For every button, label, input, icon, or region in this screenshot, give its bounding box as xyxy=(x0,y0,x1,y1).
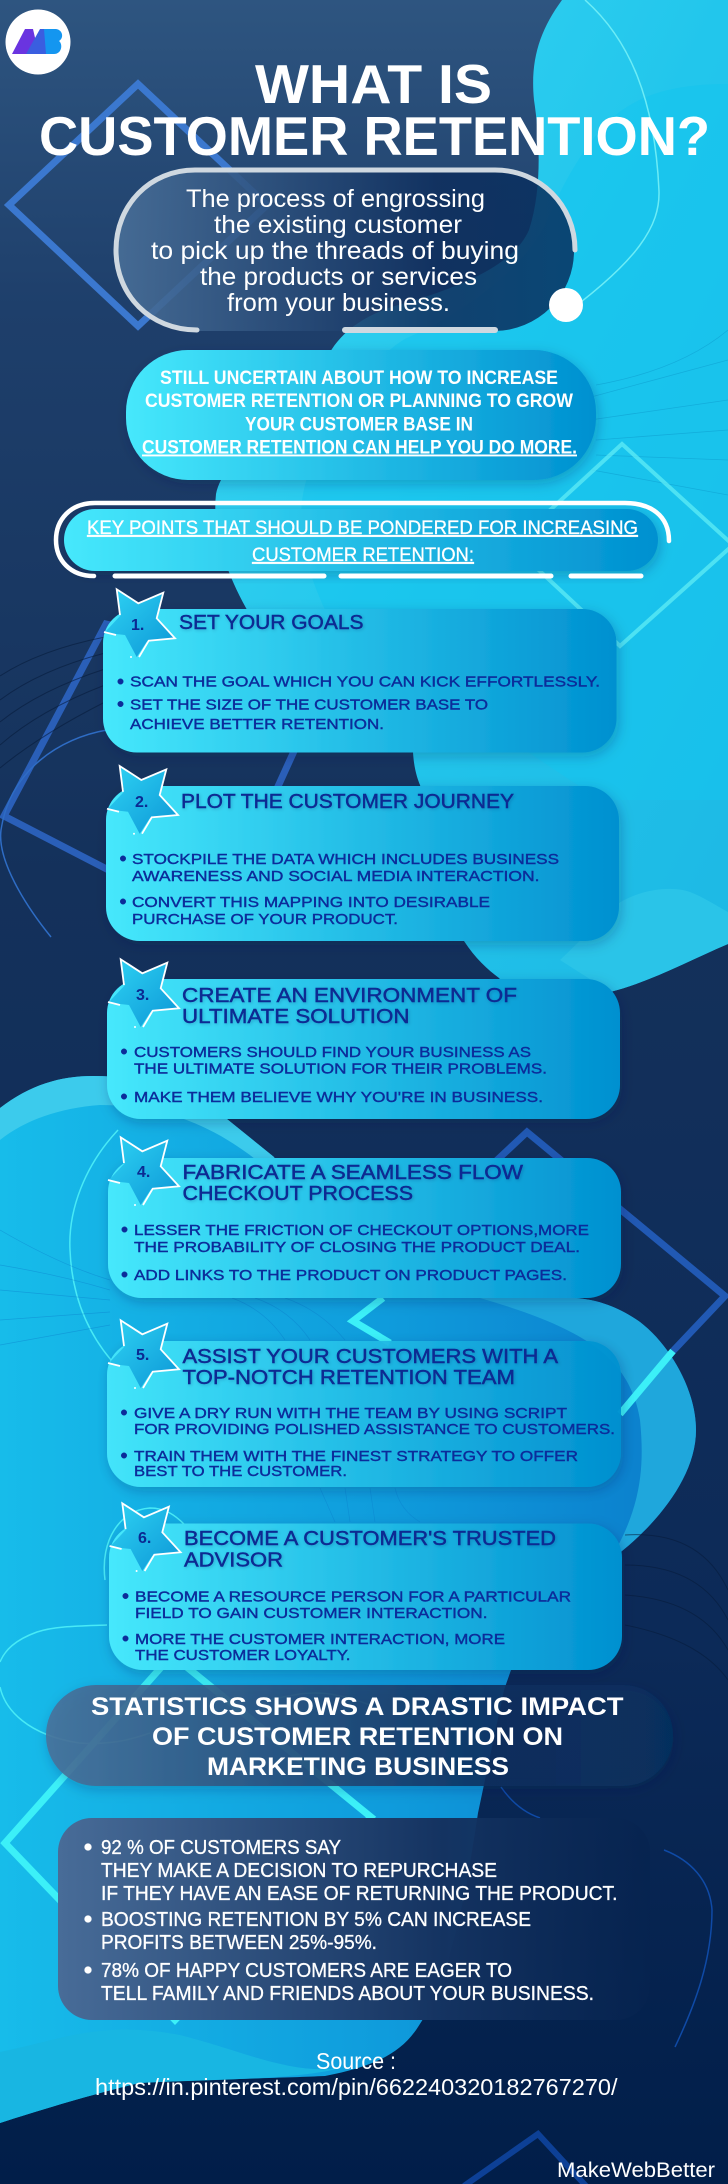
source xyxy=(95,2048,618,2100)
blob: upper right xyxy=(215,0,728,998)
decorative diamond: right cyan xyxy=(512,444,728,646)
bullets: AWARENESS AND SOCIAL MEDIA INTERACTION. xyxy=(132,868,540,885)
definition text: to pick up the threads of buying xyxy=(151,237,519,265)
blob: lower left lighter top band xyxy=(0,1076,290,1190)
callout text: YOUR CUSTOMER BASE IN xyxy=(245,414,473,436)
statistics bullets: 78% OF HAPPY CUSTOMERS ARE EAGER TO xyxy=(101,1960,512,1982)
panel: statistics heading xyxy=(46,1685,673,1786)
decorative curve: left arc xyxy=(1,730,107,937)
title: CUSTOMER RETENTION? xyxy=(39,105,710,167)
key points text xyxy=(87,518,638,566)
definition text: The process of engrossing xyxy=(186,185,485,213)
panel: definition xyxy=(116,168,575,331)
heading: TOP-NOTCH RETENTION TEAM xyxy=(182,1367,515,1389)
bullets: CONVERT THIS MAPPING INTO DESIRABLE xyxy=(132,894,490,911)
key points text: CUSTOMER RETENTION: xyxy=(252,545,474,566)
callout text: CUSTOMER RETENTION OR PLANNING TO GROW xyxy=(145,391,573,412)
bullets: SET THE SIZE OF THE CUSTOMER BASE TO xyxy=(130,696,488,714)
blob: lower left xyxy=(0,1076,696,2123)
heading: ADVISOR xyxy=(184,1550,283,1572)
blob: upper right inner layer xyxy=(301,84,728,800)
star badge 1: 1. xyxy=(131,617,144,634)
decorative curve: top right arc xyxy=(557,0,659,320)
key points text: KEY POINTS THAT SHOULD BE PONDERED FOR INCREASING xyxy=(87,518,638,539)
heading: CHECKOUT PROCESS xyxy=(182,1183,413,1205)
heading xyxy=(184,1528,556,1572)
statistics heading text xyxy=(91,1693,624,1781)
decorative curve: right bottom arc xyxy=(664,1850,712,2047)
brand name: MakeWebBetter xyxy=(557,2159,715,2182)
bullets: THE ULTIMATE SOLUTION FOR THEIR PROBLEMS. xyxy=(134,1060,547,1078)
decorative lines: lower right contours xyxy=(625,1535,728,1680)
panel: step 2 xyxy=(106,766,619,941)
star badge 4 xyxy=(108,1137,179,1206)
decorative diamond: bottom right xyxy=(464,2134,586,2184)
panel: step 1 xyxy=(103,589,616,752)
heading: FABRICATE A SEAMLESS FLOW xyxy=(182,1162,523,1184)
panel: key points heading xyxy=(56,503,669,576)
bullets: FIELD TO GAIN CUSTOMER INTERACTION. xyxy=(135,1605,488,1622)
bullets xyxy=(121,1405,615,1480)
bullets: LESSER THE FRICTION OF CHECKOUT OPTIONS,MORE xyxy=(134,1222,589,1239)
definition text xyxy=(151,185,519,317)
logo xyxy=(6,10,70,74)
star badge 2: 2. xyxy=(135,794,148,811)
star badge 6: 6. xyxy=(138,1530,151,1547)
bullets: MAKE THEM BELIEVE WHY YOU'RE IN BUSINESS. xyxy=(134,1089,543,1106)
bullets: THE CUSTOMER LOYALTY. xyxy=(135,1647,350,1664)
statistics heading text: STATISTICS SHOWS A DRASTIC IMPACT xyxy=(91,1693,624,1721)
definition text: the products or services xyxy=(200,263,477,291)
statistics bullets xyxy=(84,1837,618,2005)
title: WHAT IS xyxy=(255,53,492,115)
star badge 2 xyxy=(107,766,178,835)
bullets: SCAN THE GOAL WHICH YOU CAN KICK EFFORTLESSLY. xyxy=(130,674,600,690)
panel: statistics xyxy=(58,1818,650,2020)
blob: bottom left light wave xyxy=(0,2030,340,2123)
panel: step 3 xyxy=(107,959,620,1119)
star badge 1 xyxy=(104,589,175,658)
star badge 4: 4. xyxy=(137,1164,150,1181)
bullets xyxy=(120,851,559,928)
bullets: CUSTOMERS SHOULD FIND YOUR BUSINESS AS xyxy=(134,1044,531,1061)
statistics bullets: THEY MAKE A DECISION TO REPURCHASE xyxy=(101,1860,497,1882)
callout text: STILL UNCERTAIN ABOUT HOW TO INCREASE xyxy=(160,368,558,389)
decorative arc: cyan left ellipse xyxy=(70,1130,118,1360)
decorative diamond: bottom left cyan xyxy=(5,1655,371,2020)
callout text: CUSTOMER RETENTION CAN HELP YOU DO MORE. xyxy=(142,438,577,458)
statistics heading text: MARKETING BUSINESS xyxy=(207,1753,509,1781)
bullets xyxy=(121,1044,547,1106)
bullets: ADD LINKS TO THE PRODUCT ON PRODUCT PAGES. xyxy=(134,1267,567,1284)
panel: step 4 xyxy=(108,1137,621,1298)
title xyxy=(39,53,710,167)
decorative diamond: upper edges dark blue xyxy=(495,1132,725,1351)
definition text: from your business. xyxy=(227,289,450,317)
decorative diamond: top left xyxy=(9,84,267,326)
bullets: GIVE A DRY RUN WITH THE TEAM BY USING SCRIPT xyxy=(134,1405,567,1422)
decorative lines: left contours xyxy=(0,637,105,768)
heading xyxy=(182,1162,523,1205)
decorative lines: right fan xyxy=(580,330,728,495)
bullets: FOR PROVIDING POLISHED ASSISTANCE TO CUSTOMERS. xyxy=(134,1421,615,1438)
blob: lower left lighter rim xyxy=(480,1298,696,1560)
heading: PLOT THE CUSTOMER JOURNEY xyxy=(181,791,514,813)
decorative diamond: center cyan edges xyxy=(353,1298,390,1343)
statistics bullets: PROFITS BETWEEN 25%-95%. xyxy=(101,1932,377,1954)
statistics bullets: IF THEY HAVE AN EASE OF RETURNING THE PRODUCT. xyxy=(101,1883,618,1905)
heading: ULTIMATE SOLUTION xyxy=(182,1006,410,1028)
bullets xyxy=(118,674,600,733)
heading: ASSIST YOUR CUSTOMERS WITH A xyxy=(182,1346,559,1368)
bullets: BECOME A RESOURCE PERSON FOR A PARTICULAR xyxy=(135,1588,571,1606)
heading xyxy=(182,1346,559,1389)
star badge 6 xyxy=(110,1503,181,1572)
bullets: ACHIEVE BETTER RETENTION. xyxy=(130,716,384,733)
bullets: THE PROBABILITY OF CLOSING THE PRODUCT DEAL. xyxy=(134,1239,580,1256)
statistics bullets: 92 % OF CUSTOMERS SAY xyxy=(101,1837,341,1859)
statistics bullets: TELL FAMILY AND FRIENDS ABOUT YOUR BUSINESS. xyxy=(101,1983,594,2005)
statistics bullets: BOOSTING RETENTION BY 5% CAN INCREASE xyxy=(101,1909,531,1931)
blob: lower band upper right xyxy=(560,889,728,992)
source: https://in.pinterest.com/pin/662240320182767270/ xyxy=(95,2074,618,2100)
bullets: PURCHASE OF YOUR PRODUCT. xyxy=(132,911,398,928)
statistics heading text: OF CUSTOMER RETENTION ON xyxy=(152,1723,563,1751)
heading: BECOME A CUSTOMER'S TRUSTED xyxy=(184,1528,556,1550)
heading: CREATE AN ENVIRONMENT OF xyxy=(182,985,517,1007)
heading: SET YOUR GOALS xyxy=(179,612,364,634)
callout text xyxy=(142,368,577,458)
bullets: TRAIN THEM WITH THE FINEST STRATEGY TO OFFER xyxy=(134,1448,578,1465)
panel: still uncertain callout xyxy=(126,350,596,480)
decorative curve: small ring behind card 6 xyxy=(0,1508,370,1743)
bullets xyxy=(122,1222,589,1284)
star badge 5 xyxy=(108,1320,179,1389)
star badge 3 xyxy=(108,959,179,1028)
icon: white dot xyxy=(549,288,583,322)
star badge 5: 5. xyxy=(136,1347,149,1364)
decorative curve: centre bottom arc xyxy=(501,1787,540,1818)
panel: step 5 xyxy=(107,1320,621,1487)
source: Source : xyxy=(316,2048,396,2074)
bullets: BEST TO THE CUSTOMER. xyxy=(134,1463,347,1480)
star badge 3: 3. xyxy=(136,987,149,1004)
bullets: MORE THE CUSTOMER INTERACTION, MORE xyxy=(135,1631,505,1648)
panel: step 6 xyxy=(109,1503,622,1670)
decorative line: right cyan edge xyxy=(620,1351,673,1414)
decorative lines: fan in lower blob xyxy=(0,1230,420,1522)
bullets xyxy=(123,1588,571,1664)
definition text: the existing customer xyxy=(214,211,462,239)
bullets: STOCKPILE THE DATA WHICH INCLUDES BUSINESS xyxy=(132,851,559,868)
heading xyxy=(182,985,517,1028)
decorative diamond: left middle xyxy=(4,624,330,925)
